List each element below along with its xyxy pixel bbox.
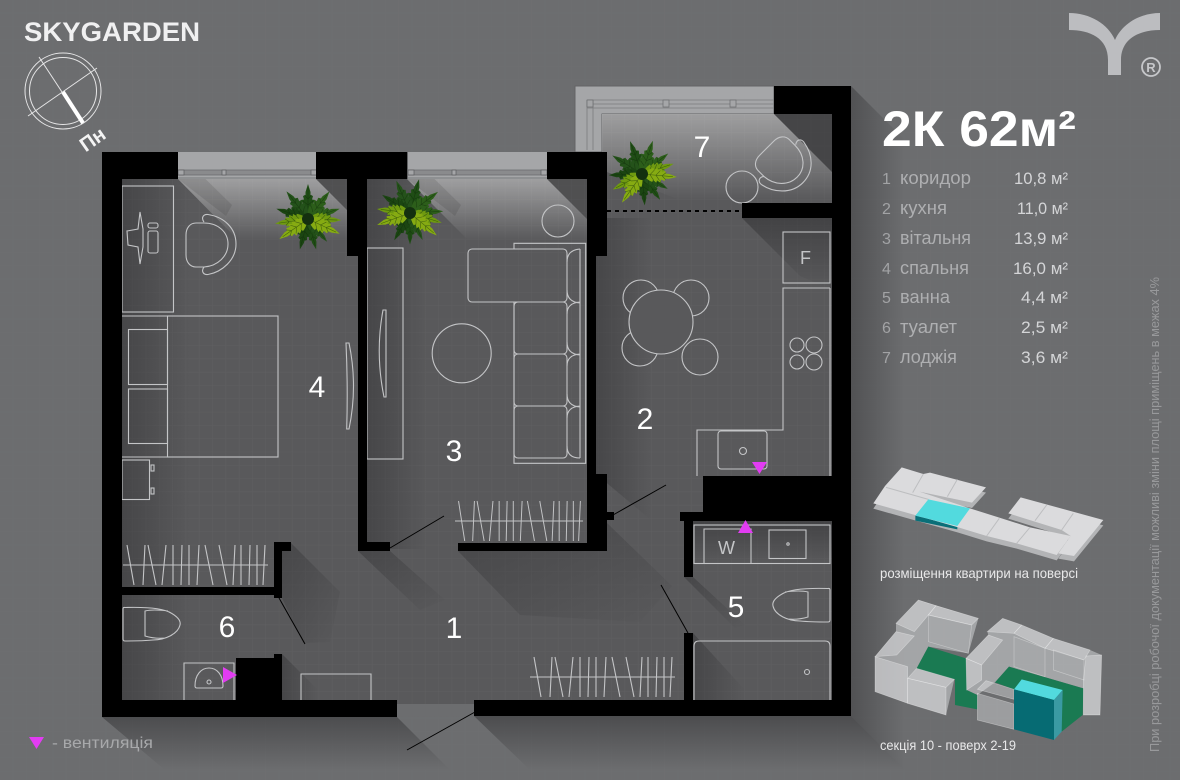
ventilation legend: - вентиляція (52, 735, 153, 752)
section location diagram (875, 600, 1102, 740)
compass (25, 53, 110, 157)
room lighting and interior shadows (122, 114, 832, 700)
room area table: 2 (882, 201, 891, 218)
room numbers: 6 (219, 611, 235, 644)
appliance letters (718, 248, 811, 558)
plant: bedroom (274, 184, 343, 251)
room area table: 16,0 м² (1013, 259, 1068, 278)
loggia threshold dashed line (607, 210, 742, 212)
appliance letters: F (800, 248, 811, 268)
ventilation markers (223, 462, 767, 683)
room area table: 7 (882, 350, 891, 367)
compass: Пн (76, 123, 110, 157)
room numbers (219, 131, 744, 645)
room area table: 1 (882, 171, 891, 188)
room numbers: 3 (446, 435, 462, 468)
windows (178, 152, 547, 179)
room area table: туалет (900, 317, 957, 337)
room numbers: 2 (637, 403, 653, 436)
room area table: 6 (882, 320, 891, 337)
room area table: 3,6 м² (1021, 348, 1068, 367)
door swings (279, 485, 688, 750)
room numbers: 7 (694, 131, 710, 164)
furniture: bedroom (122, 186, 354, 585)
plant: living room (369, 170, 453, 253)
furniture: bathroom (694, 525, 830, 700)
room area table: 13,9 м² (1014, 229, 1068, 248)
floor diagram caption: розміщення квартири на поверсі (880, 565, 1078, 581)
logo: R (1146, 60, 1156, 75)
room numbers: 4 (309, 371, 325, 404)
outer shadows of the building (102, 86, 905, 770)
vertical disclaimer: При розробці робочої документації можливі зміни площі приміщень в межах 4% (1147, 277, 1162, 752)
room area table: 3 (882, 231, 891, 248)
room area table: вітальня (900, 228, 971, 248)
room area table: 10,8 м² (1014, 169, 1068, 188)
furniture: kitchen and dining (622, 232, 830, 476)
room area table: кухня (900, 198, 947, 218)
apartment floor (122, 113, 832, 704)
room area table: 11,0 м² (1017, 199, 1068, 218)
room area table: 4 (882, 261, 891, 278)
room area table: 2,5 м² (1021, 318, 1068, 337)
section diagram caption: секція 10 - поверх 2-19 (880, 737, 1016, 753)
floor location diagram (873, 467, 1103, 561)
room area table: коридор (900, 168, 971, 188)
room area table: 4,4 м² (1021, 288, 1068, 307)
balcony outer slab (575, 86, 775, 152)
room numbers: 1 (446, 612, 462, 645)
room area table: ванна (900, 287, 951, 307)
walls (102, 86, 851, 717)
appliance letters: W (718, 538, 735, 558)
room numbers: 5 (728, 591, 744, 624)
brand name: SKYGARDEN (24, 17, 200, 47)
furniture: living room (367, 205, 586, 541)
furniture: loggia (726, 127, 824, 204)
logo (1069, 13, 1160, 76)
room area table (882, 168, 1068, 367)
furniture: toilet room and corridor (123, 607, 675, 700)
room area table: 5 (882, 290, 891, 307)
apartment title: 2К 62м² (882, 101, 1076, 157)
plant: loggia (598, 129, 686, 216)
room area table: лоджія (900, 347, 957, 367)
room area table: спальня (900, 258, 969, 278)
